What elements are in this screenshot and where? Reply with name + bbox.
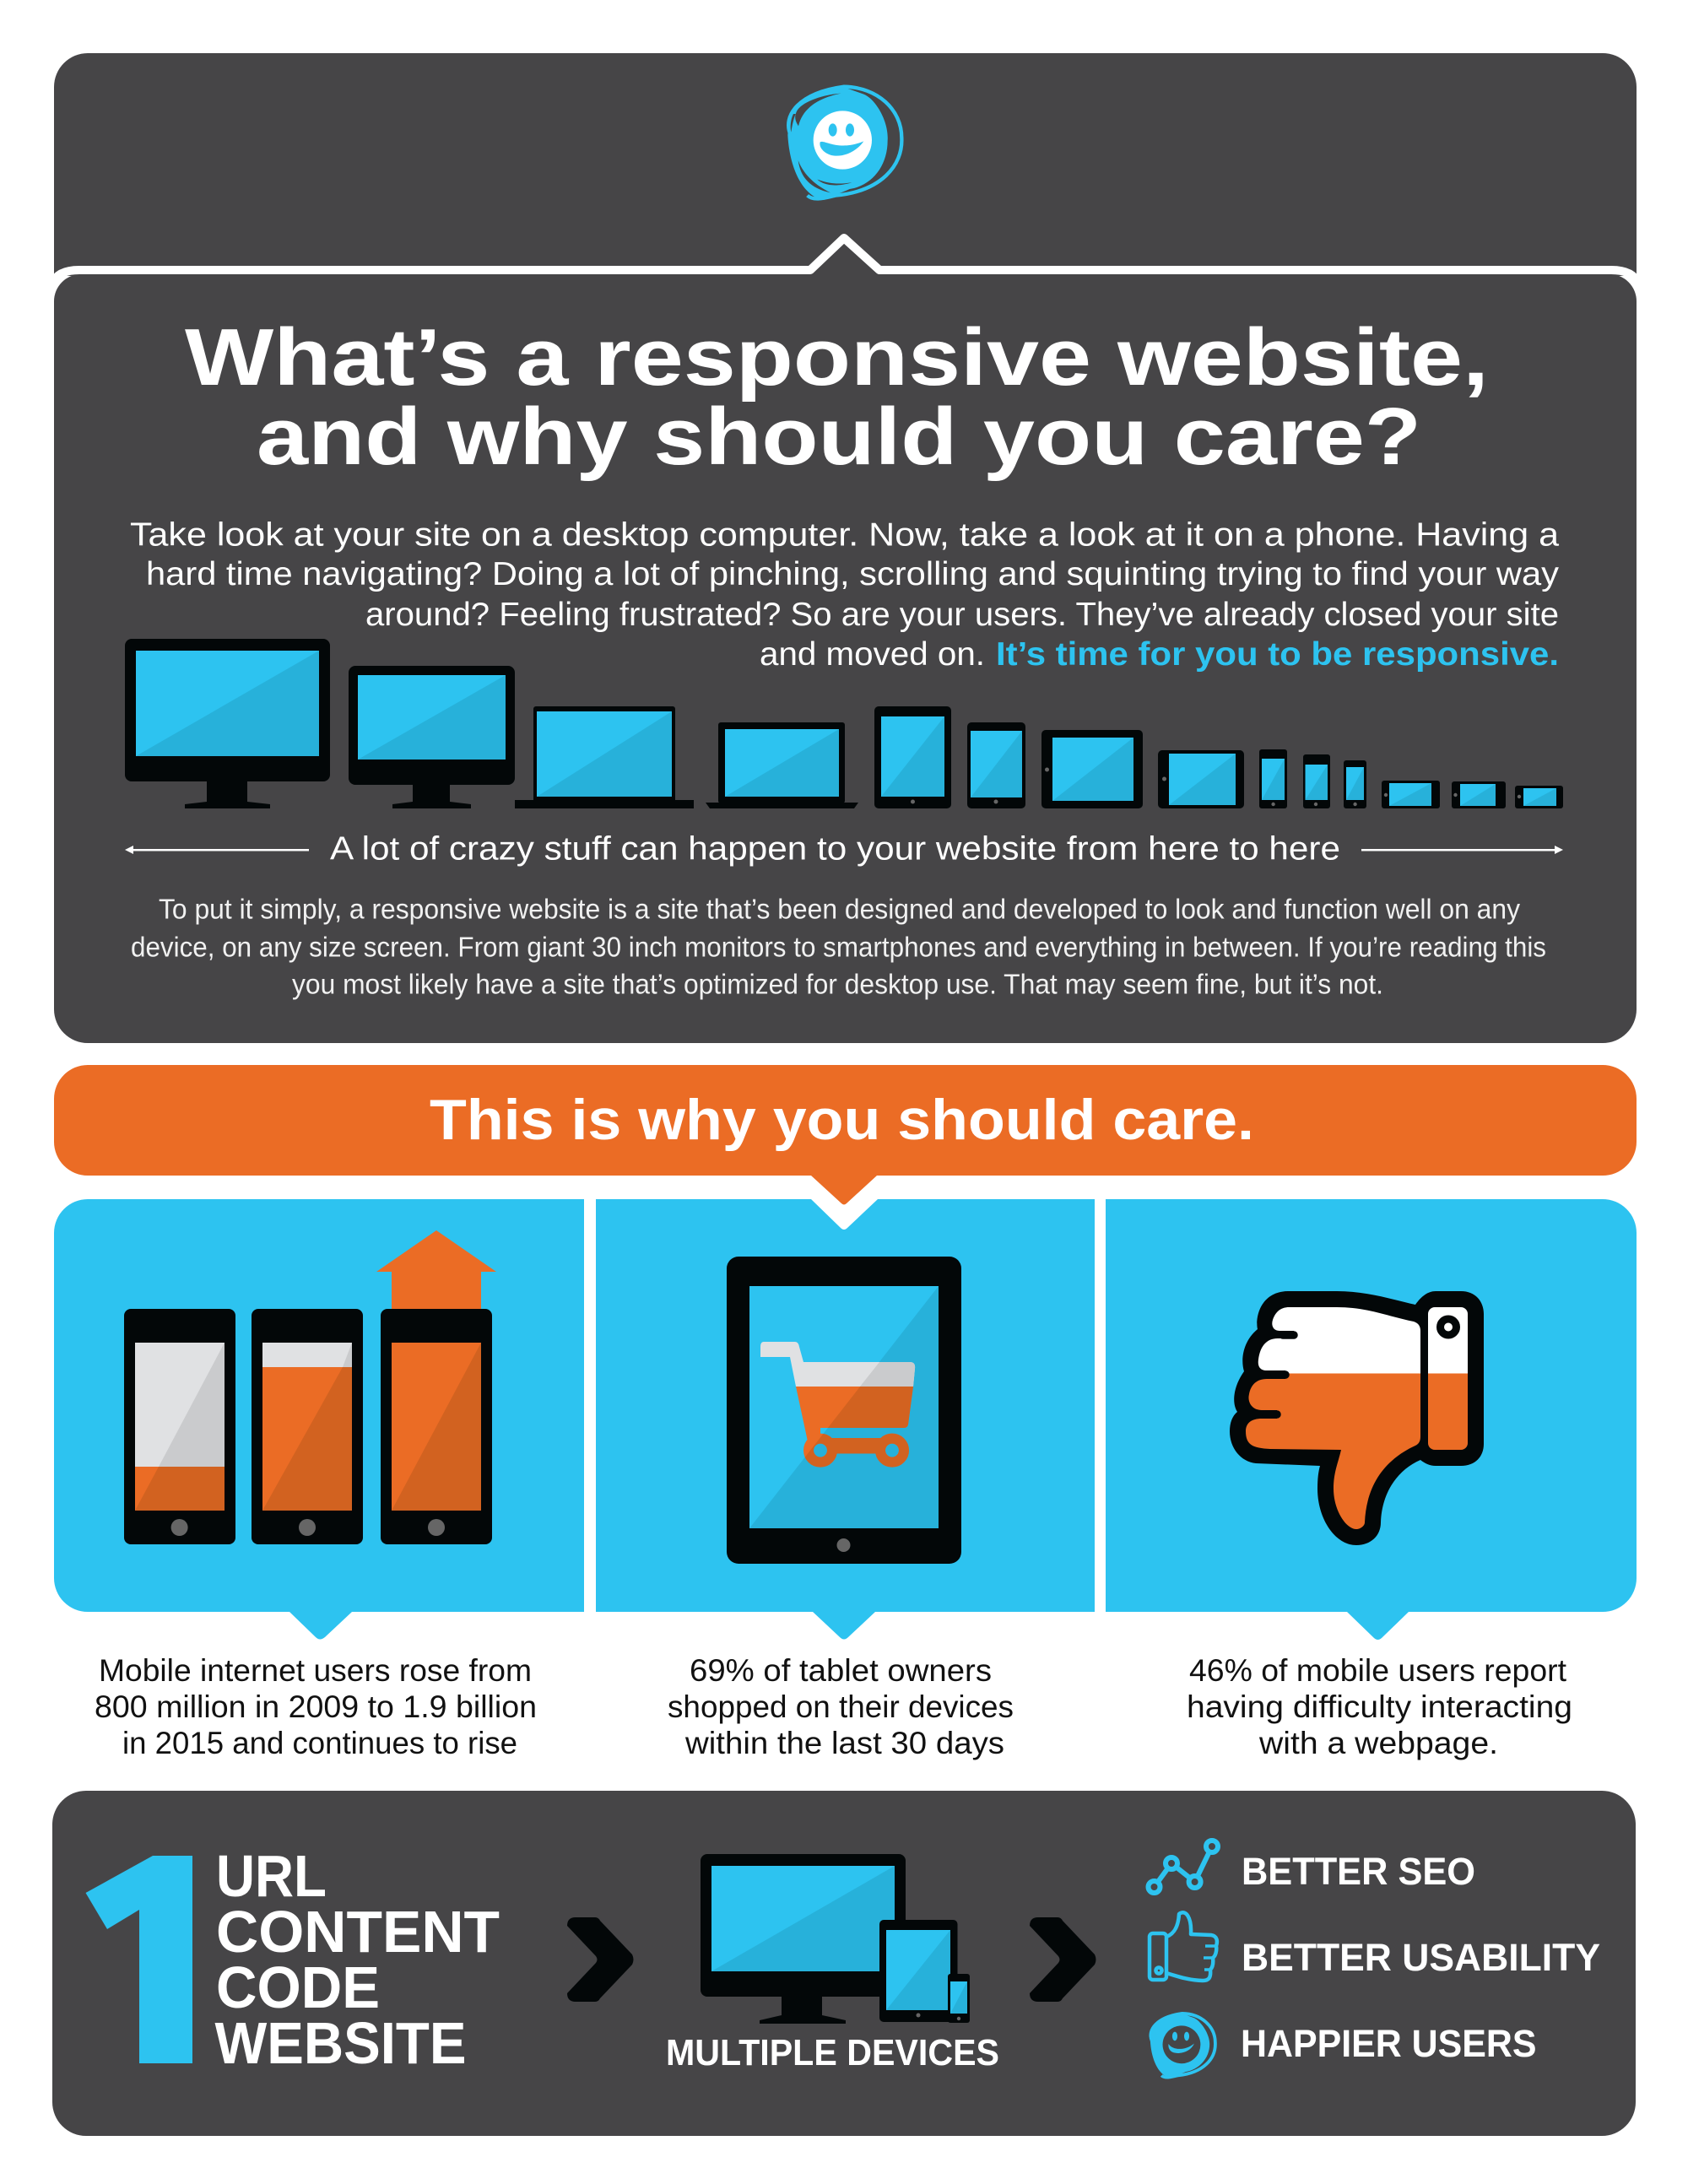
caption: panel 1: in 2015 and continues to rise <box>122 1726 517 1760</box>
intro paragraph: It’s time for you to be responsive. <box>996 636 1559 673</box>
text: url content code website: CONTENT <box>216 1899 500 1965</box>
icon: shopping cart <box>760 1342 915 1462</box>
icon: phone 2 <box>1303 754 1330 808</box>
caption: panel 3: with a webpage. <box>1258 1726 1498 1760</box>
caption: panel 2: shopped on their devices <box>668 1689 1014 1724</box>
caption: panel 3 <box>1187 1653 1572 1760</box>
caption: panel 3: 46% of mobile users report <box>1189 1653 1567 1688</box>
panel: stat columns <box>54 1199 1637 1760</box>
icon: landscape phone 3 <box>1515 786 1563 808</box>
caption: panel 2 <box>668 1653 1014 1760</box>
text: url content code website <box>214 1843 500 2076</box>
explanation paragraph: To put it simply, a responsive website is a site that’s been designed and developed to look and function well on any <box>159 893 1520 925</box>
banner: this is why you should care <box>54 1065 1637 1205</box>
caption: panel 1: 800 million in 2009 to 1.9 billion <box>95 1689 537 1724</box>
stat panel 2: tablet shoppers <box>596 1199 1095 1639</box>
icon: phone low usage <box>124 1309 235 1544</box>
icon: landscape phone 2 <box>1452 781 1506 808</box>
text: better seo: BETTER SEO <box>1242 1850 1475 1893</box>
caption: from here to here: A lot of crazy stuff can happen to your website from here to here <box>330 830 1340 868</box>
banner heading: This is why you should care. <box>430 1088 1254 1152</box>
intro paragraph: around? Feeling frustrated? So are your users. They’ve already closed your site <box>365 597 1559 633</box>
icon: tablet <box>727 1257 961 1564</box>
icon: landscape phone 1 <box>1382 781 1440 808</box>
title: What’s a responsive website, <box>185 312 1489 403</box>
text: multiple devices: MULTIPLE DEVICES <box>666 2032 999 2073</box>
icon: phone 3 <box>1344 760 1366 808</box>
icon: seo chart <box>1148 1841 1218 1893</box>
arrow: left <box>125 846 309 854</box>
title: and why should you care? <box>257 392 1421 482</box>
panel: one url summary <box>52 1791 1636 2136</box>
icon: tablet landscape large <box>1041 730 1143 808</box>
arrow: right <box>1361 846 1563 854</box>
explanation paragraph <box>131 893 1546 999</box>
arrow: chevron 2 <box>1030 1917 1096 2002</box>
icon: thumbs down <box>1230 1291 1484 1545</box>
icon: phone 1 <box>1259 749 1287 808</box>
icon: thumbs up <box>1150 1912 1217 1981</box>
icon: tablet portrait large <box>874 706 951 808</box>
intro paragraph: and moved on. <box>760 636 985 673</box>
icon: multiple devices <box>701 1854 970 2024</box>
icon: tablet portrait small <box>967 722 1025 808</box>
panel: main introduction <box>52 238 1638 1043</box>
intro paragraph <box>130 516 1560 673</box>
text: url content code website: URL <box>216 1843 327 1909</box>
icon: happy user <box>1150 2014 1215 2078</box>
text: url content code website: WEBSITE <box>214 2010 466 2076</box>
stat panel 3: difficulty interacting <box>1106 1199 1637 1640</box>
icon: growth arrow <box>376 1230 496 1316</box>
text: better usability: BETTER USABILITY <box>1242 1936 1600 1979</box>
icon: phone medium usage <box>252 1309 363 1544</box>
stat panel 1: mobile users <box>54 1199 584 1639</box>
arrow: chevron 1 <box>567 1917 633 2002</box>
explanation paragraph: device, on any size screen. From giant 30 inch monitors to smartphones and everything in between. If you’re reading this <box>131 932 1546 962</box>
icon: laptop <box>515 706 694 808</box>
text: happier users: HAPPIER USERS <box>1241 2022 1536 2065</box>
caption: panel 3: having difficulty interacting <box>1187 1689 1572 1724</box>
numeral 1 <box>86 1856 192 2063</box>
caption: panel 1: Mobile internet users rose from <box>99 1653 532 1688</box>
panel: header with logo <box>54 53 1637 276</box>
intro paragraph: hard time navigating? Doing a lot of pinching, scrolling and squinting trying to find your way <box>146 556 1560 592</box>
icon: smiley logo <box>787 87 901 199</box>
caption: panel 1 <box>95 1653 537 1760</box>
icon: phone full usage <box>381 1309 492 1544</box>
device lineup <box>125 639 1563 808</box>
icon: small laptop <box>706 722 858 808</box>
caption: panel 2: within the last 30 days <box>684 1726 1004 1760</box>
icon: large monitor <box>125 639 330 808</box>
intro paragraph: Take look at your site on a desktop computer. Now, take a look at it on a phone. Having a <box>130 516 1559 554</box>
title <box>185 312 1489 482</box>
icon: tablet landscape small <box>1158 750 1244 808</box>
icon: monitor <box>349 666 515 808</box>
text: url content code website: CODE <box>216 1954 380 2020</box>
explanation paragraph: you most likely have a site that’s optimized for desktop use. That may seem fine, but it’s not. <box>292 969 1383 999</box>
caption: panel 2: 69% of tablet owners <box>690 1653 992 1688</box>
